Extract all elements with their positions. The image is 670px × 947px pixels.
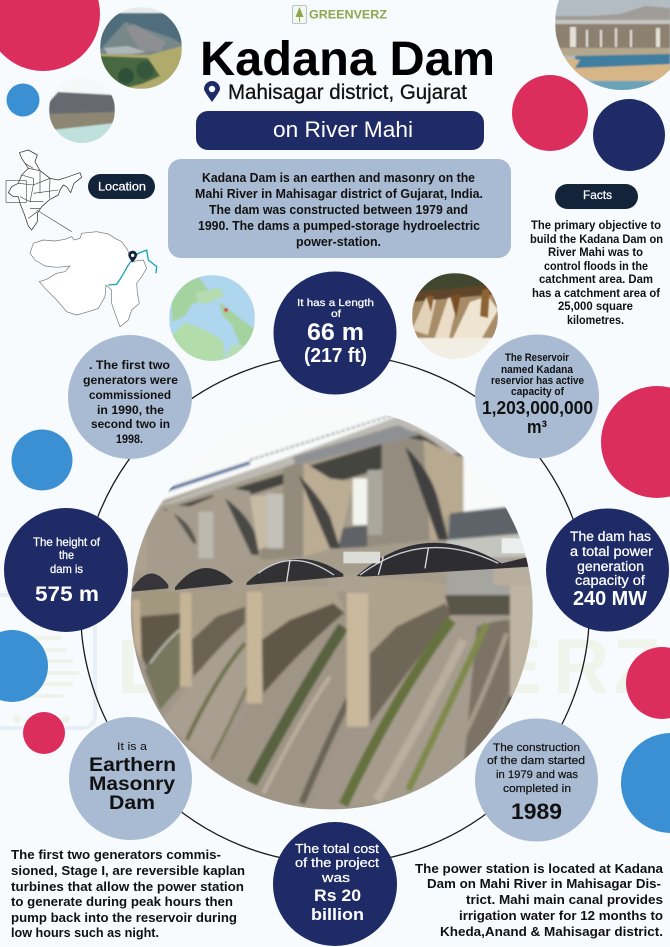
- photo: location map: [169, 275, 256, 362]
- circle: construction dates: [475, 718, 598, 842]
- circle: construction dates: in 1979 and was: [496, 769, 579, 781]
- text: power station paragraph: irrigation water for 12 months to: [459, 908, 663, 923]
- circle: project cost: of the project: [295, 855, 379, 870]
- title: Kadana Dam: [200, 33, 495, 86]
- decorative circle: red right: [601, 386, 670, 498]
- text: facts paragraph: has a catchment area of: [532, 288, 660, 300]
- pill: Location: Location: [98, 180, 146, 194]
- circle: reservoir capacity: 1,203,000,000: [482, 398, 593, 418]
- logo: GREENVERZ: [309, 8, 387, 22]
- circle: power capacity: [546, 508, 669, 632]
- circle: length: 66 m: [307, 319, 364, 346]
- text: turbines paragraph: low hours such as night.: [11, 925, 159, 940]
- circle: length: (217 ft): [304, 345, 367, 367]
- circle: dam type: It is a: [117, 741, 148, 753]
- text: facts paragraph: build the Kadana Dam on: [530, 234, 663, 246]
- circle: generators commissioned: . The first two: [89, 358, 170, 372]
- text: turbines paragraph: [11, 847, 245, 940]
- text: facts paragraph: 25,000 square: [558, 301, 633, 313]
- circle: height: 575 m: [35, 583, 99, 606]
- decorative circle: navy upper right: [593, 99, 665, 171]
- circle: height: dam is: [50, 562, 83, 576]
- circle: construction dates: completed in: [503, 783, 571, 795]
- location line with pin: Mahisagar district, Gujarat: [228, 81, 467, 104]
- text: turbines paragraph: to generate during peak hours then: [11, 894, 233, 909]
- circle: construction dates: The construction: [493, 742, 580, 754]
- circle: reservoir capacity: [475, 334, 599, 458]
- circle: length: It has a Length: [297, 297, 374, 309]
- circle: length: [274, 272, 396, 394]
- circle: generators commissioned: second two in: [91, 417, 170, 431]
- circle: power capacity: The dam has: [570, 529, 651, 544]
- circle: generators commissioned: generators were: [83, 373, 178, 387]
- circle: generators commissioned: [68, 335, 192, 459]
- banner: river name: [196, 111, 484, 150]
- text: facts paragraph: control floods in the: [544, 261, 648, 273]
- text: turbines paragraph: sioned, Stage I, are reversible kaplan: [11, 863, 245, 878]
- text: power station paragraph: Kheda,Anand & Mahisagar district.: [440, 924, 663, 939]
- panel: introduction: 1990. The dams a pumped-storage hydroelectric: [198, 218, 480, 233]
- decorative circle: red lower left: [23, 712, 65, 754]
- text: power station paragraph: The power station is located at Kadana: [415, 861, 664, 876]
- circle: generators commissioned: in 1990, the: [97, 403, 164, 417]
- text: power station paragraph: Dam on Mahi River in Mahisagar Dis-: [427, 876, 661, 891]
- watermark: faint document icon and wordmark: [0, 595, 661, 728]
- text: facts paragraph: kilometres.: [567, 315, 624, 327]
- decorative circle: blue small: [6, 84, 40, 116]
- circle: project cost: The total cost: [295, 841, 379, 856]
- circle: height: the: [59, 548, 74, 562]
- panel: introduction: power-station.: [296, 234, 381, 249]
- circle: reservoir capacity: capacity of: [511, 386, 564, 398]
- panel: introduction: [168, 159, 511, 258]
- circle: project cost: Rs 20: [314, 886, 361, 905]
- photo: dam embankment: [49, 90, 115, 143]
- banner: river name: on River Mahi: [273, 117, 413, 142]
- decorative circle: blue left: [12, 430, 72, 490]
- circle: generators commissioned: commissioned: [89, 388, 171, 402]
- photo: spillway gates discharging: [412, 273, 498, 360]
- text: facts paragraph: catchment area. Dam: [539, 274, 653, 286]
- logo: [292, 6, 387, 24]
- circle: power capacity: capacity of: [575, 573, 645, 588]
- decorative circle: blue lower right: [621, 733, 670, 833]
- text: turbines paragraph: pump back into the reservoir during: [11, 910, 237, 925]
- photo: dam aerial view: [100, 7, 182, 89]
- circle: project cost: was: [321, 870, 351, 885]
- circle: dam type: Dam: [109, 793, 155, 814]
- circle: generators commissioned: 1998.: [116, 432, 143, 446]
- text: power station paragraph: trict. Mahi main canal provides: [466, 892, 663, 907]
- decorative circle: red lower right: [626, 647, 670, 719]
- text: turbines paragraph: The first two generators commis-: [11, 847, 221, 862]
- circle: height: [4, 508, 128, 632]
- circle: reservoir capacity: m³: [527, 417, 547, 437]
- icon: Gujarat map with river and pin: [30, 232, 157, 327]
- circle: reservoir capacity: reservior has active: [491, 375, 584, 387]
- panel: introduction: The dam was constructed between 1979 and: [209, 202, 468, 217]
- photo: dam and reservoir top right: [555, 0, 670, 91]
- pill: Facts: [555, 184, 638, 209]
- connecting ring: [80, 354, 590, 864]
- decorative circle: blue lower left: [0, 630, 48, 702]
- circle: project cost: billion: [311, 905, 364, 924]
- circle: dam type: Earthern: [89, 755, 176, 776]
- panel: introduction: Kadana Dam is an earthen and masonry on the: [202, 170, 475, 185]
- circle: construction dates: 1989: [511, 799, 562, 824]
- circle: construction dates: of the dam started: [487, 755, 585, 767]
- circle: dam type: Masonry: [89, 774, 175, 795]
- circle: length: of: [331, 308, 341, 320]
- circle: reservoir capacity: The Reservoir: [505, 352, 570, 364]
- circle: reservoir capacity: named Kadana: [501, 364, 574, 376]
- icon: India map with Gujarat highlight box: [6, 150, 82, 232]
- text: turbines paragraph: turbines that allow the power station: [11, 879, 244, 894]
- circle: power capacity: 240 MW: [573, 588, 647, 610]
- panel: introduction: Mahi River in Mahisagar district of Gujarat, India.: [195, 186, 483, 201]
- text: facts paragraph: River Mahi was to: [548, 247, 643, 259]
- text: power station paragraph: [415, 861, 664, 939]
- pill: Facts: Facts: [583, 188, 612, 202]
- text: facts paragraph: The primary objective to: [531, 220, 661, 232]
- circle: dam type: [69, 717, 192, 840]
- circle: power capacity: generation: [577, 559, 644, 574]
- photo: main dam spillway: [130, 400, 540, 812]
- circle: height: The height of: [33, 535, 101, 549]
- circle: power capacity: a total power: [570, 544, 654, 559]
- circle: project cost: [273, 822, 397, 946]
- text: facts paragraph: [530, 220, 663, 327]
- watermark: faint document icon and wordmark: DEVERZ: [117, 622, 661, 710]
- decorative circle: red top left: [0, 0, 100, 71]
- pill: Location: [88, 174, 155, 199]
- decorative circle: red upper right: [512, 75, 588, 151]
